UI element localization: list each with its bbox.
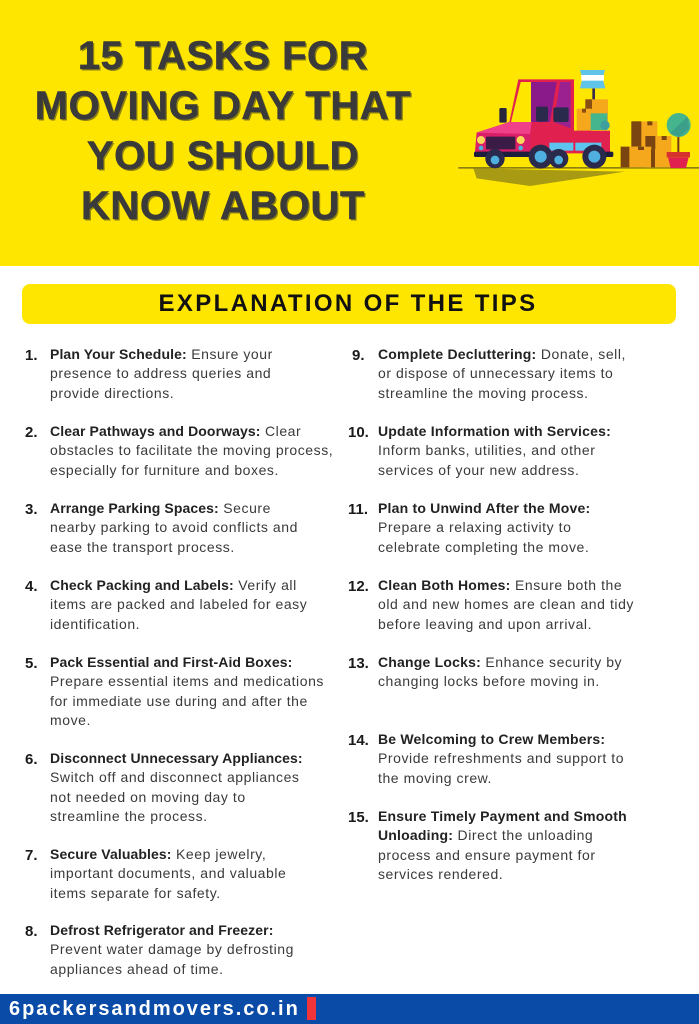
section heading: EXPLANATION OF THE TIPS (159, 290, 537, 317)
tip 6: Disconnect Unnecessary Appliances: Switch off and disconnect appliances not needed on moving day to streamline the process. (50, 750, 303, 824)
illustration: truck, boxes and plant (458, 70, 699, 186)
tip 12: Clean Both Homes: Ensure both the old and new homes are clean and tidy before leaving and upon arrival. (378, 577, 634, 632)
tip 5: 5. (25, 655, 38, 672)
header panel (0, 0, 699, 266)
section heading (22, 284, 676, 324)
tip 1: 1. (25, 347, 38, 364)
tip 12: 12. (348, 578, 369, 595)
tip 3: Arrange Parking Spaces: Secure nearby parking to avoid conflicts and ease the transport process. (50, 500, 298, 554)
tip 14: 14. (348, 732, 369, 749)
title: MOVING DAY THAT (35, 84, 411, 128)
tip 8: Defrost Refrigerator and Freezer: Prevent water damage by defrosting appliances ahead of time. (50, 922, 294, 976)
tip 4: Check Packing and Labels: Verify all items are packed and labeled for easy identification. (50, 577, 307, 632)
tip 6: 6. (25, 751, 38, 768)
tip 10: 10. (348, 424, 369, 441)
tip 13: 13. (348, 655, 369, 672)
tip 11: 11. (348, 501, 368, 518)
title: KNOW ABOUT (81, 184, 365, 228)
tip 7: 7. (25, 847, 38, 864)
title: 15 TASKS FOR (78, 34, 368, 78)
tip 7: Secure Valuables: Keep jewelry, important documents, and valuable items separate for safety. (50, 846, 286, 900)
tip 13: Change Locks: Enhance security by changing locks before moving in. (378, 654, 622, 689)
footer bar: 6packersandmovers.co.in (9, 998, 300, 1020)
tip 9: 9. (352, 347, 365, 364)
title (35, 34, 412, 228)
tip 2: Clear Pathways and Doorways: Clear obstacles to facilitate the moving process, especially for furniture and boxes. (50, 423, 333, 478)
tip 10: Update Information with Services: Inform banks, utilities, and other services of your new address. (378, 423, 611, 478)
title: YOU SHOULD (87, 134, 359, 178)
tip 4: 4. (25, 578, 38, 595)
tip 1: Plan Your Schedule: Ensure your presence to address queries and provide directions. (50, 346, 273, 400)
tip 5: Pack Essential and First-Aid Boxes: Prepare essential items and medications for immediate use during and after the move. (50, 654, 324, 728)
tip 11: Plan to Unwind After the Move: Prepare a relaxing activity to celebrate completing the move. (378, 500, 590, 554)
tip 15: Ensure Timely Payment and Smooth Unloading: Direct the unloading process and ensure payment for services rendered. (378, 808, 627, 882)
tip 2: 2. (25, 424, 38, 441)
tip 9: Complete Decluttering: Donate, sell, or dispose of unnecessary items to streamline the moving process. (378, 346, 626, 400)
tip 15: 15. (348, 809, 369, 826)
tip 8: 8. (25, 923, 38, 940)
footer bar (0, 994, 699, 1024)
tip 3: 3. (25, 501, 38, 518)
tip 14: Be Welcoming to Crew Members: Provide refreshments and support to the moving crew. (378, 731, 624, 786)
